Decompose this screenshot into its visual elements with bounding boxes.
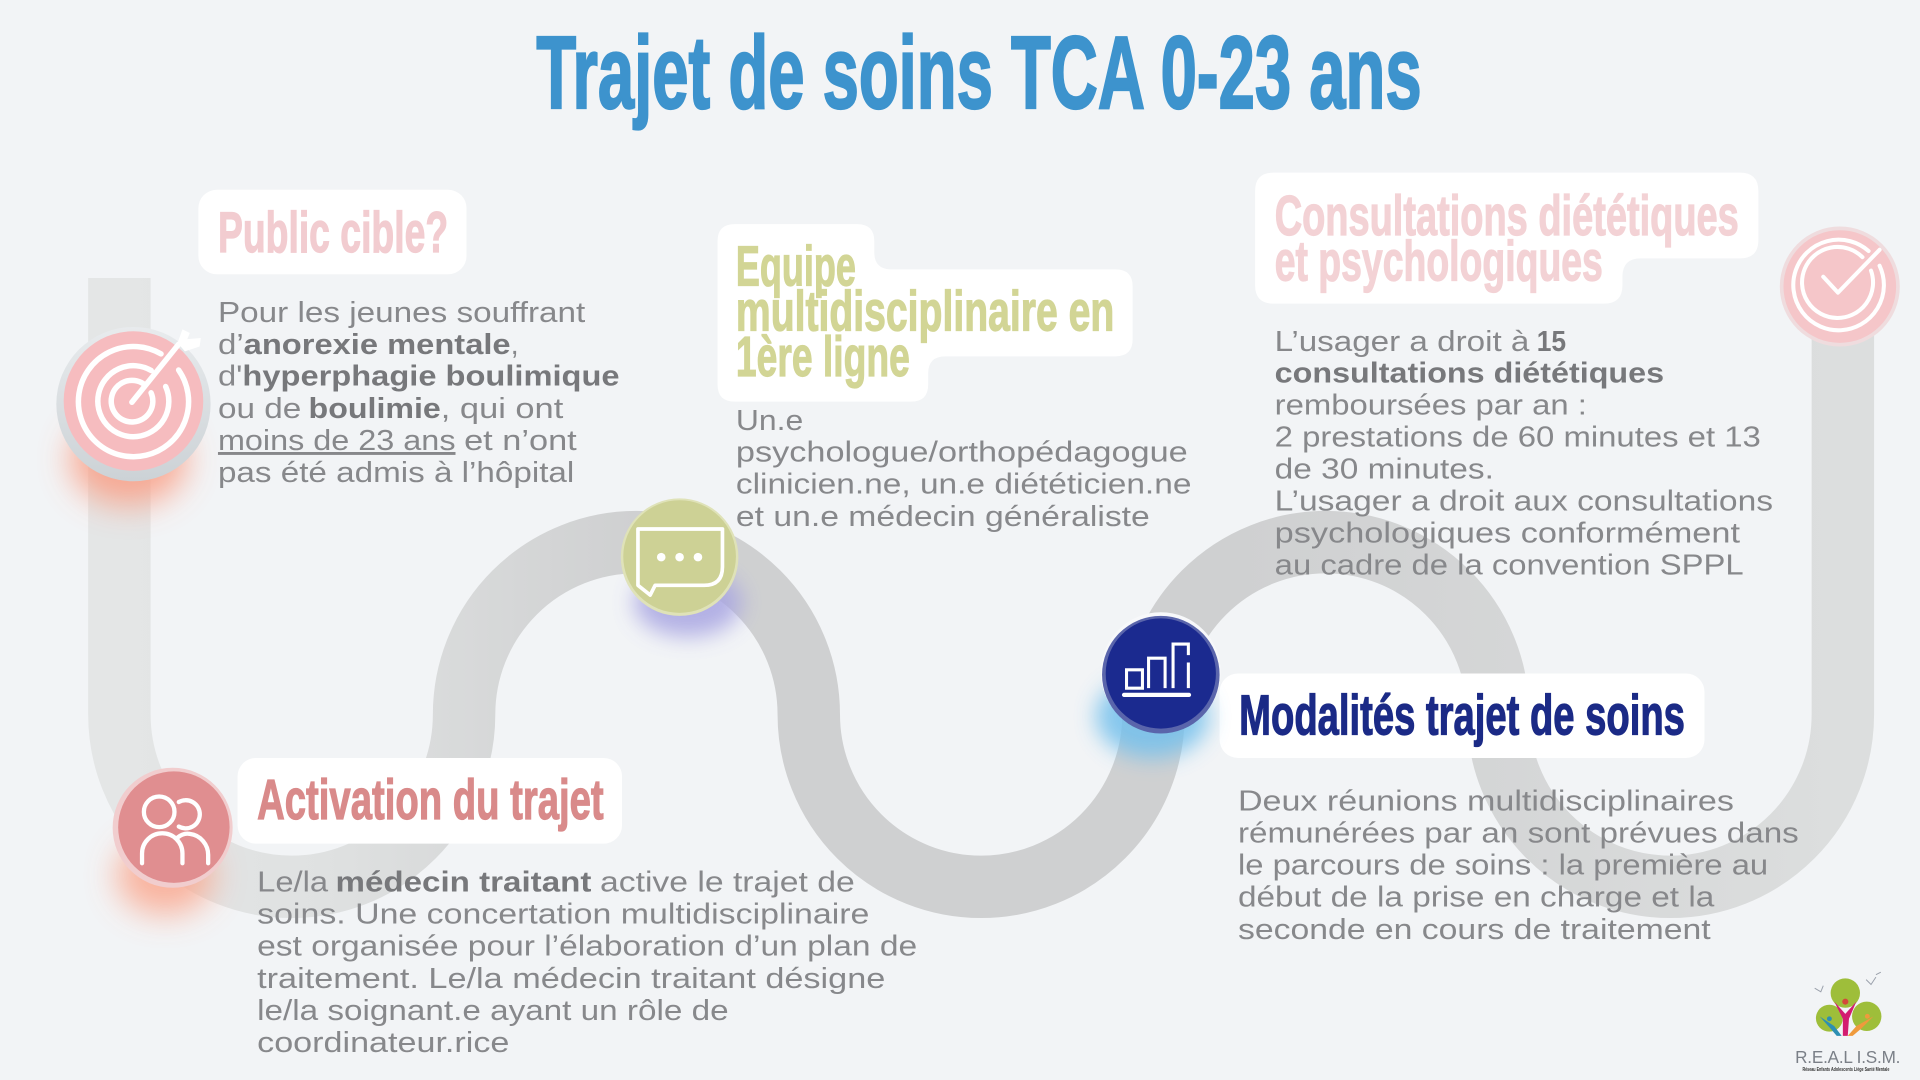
- heading box: public cible: [198, 190, 467, 274]
- logo wordmark: R.E.A.L I.S.M.: [1795, 1047, 1900, 1067]
- text block: public cible: Pour les jeunes souffrant: [218, 297, 585, 329]
- icon: bar chart: [1096, 612, 1221, 758]
- heading: consultations: [1275, 184, 1739, 292]
- text block: consultations: L’usager a droit aux consultations: [1275, 486, 1773, 518]
- text block: equipe: Un.e: [736, 405, 803, 437]
- text block: consultations: psychologiques conformément: [1275, 517, 1740, 549]
- heading box: activation: [238, 758, 622, 844]
- heading: activation: Activation du trajet: [257, 768, 604, 831]
- text block: public cible: [218, 297, 620, 489]
- text block: activation: soins. Une concertation multidisciplinaire: [257, 899, 869, 931]
- text block: consultations: remboursées par an :: [1275, 389, 1587, 421]
- text block: activation: Le/la: [257, 866, 329, 898]
- text block: activation: [257, 866, 917, 1059]
- text block: activation: est organisée pour l’élaboration d’un plan de: [257, 931, 917, 963]
- icon: people: [113, 768, 233, 915]
- logo: REALISM: [1795, 972, 1900, 1073]
- text block: public cible: moins de 23 ans: [218, 425, 456, 457]
- title: Trajet de soins TCA 0-23 ans: [536, 15, 1422, 130]
- heading box: consultations: [1255, 173, 1758, 304]
- text block: public cible: d’: [218, 329, 244, 361]
- text block: consultations: consultations diététiques: [1275, 358, 1664, 390]
- text block: equipe: [736, 405, 1191, 533]
- text block: consultations: 15: [1537, 326, 1566, 358]
- text block: consultations: L’usager a droit à: [1275, 326, 1530, 358]
- text block: activation: active le trajet de: [600, 866, 855, 898]
- text block: public cible: anorexie mentale: [244, 329, 511, 361]
- text block: public cible: pas été admis à l’hôpital: [218, 457, 574, 489]
- text block: consultations: de 30 minutes.: [1275, 454, 1494, 486]
- text block: public cible: d': [218, 361, 242, 393]
- icon: check: [1780, 227, 1900, 347]
- text block: public cible: ou de: [218, 393, 301, 425]
- text block: activation: coordinateur.rice: [257, 1027, 509, 1059]
- icon: chat bubble: [621, 498, 742, 637]
- heading: public cible: Public cible?: [218, 201, 448, 265]
- panel: consultations: [1255, 173, 1773, 581]
- heading box: equipe: [718, 224, 1133, 402]
- text block: modalites: le parcours de soins : la première au: [1238, 849, 1768, 881]
- text block: equipe: clinicien.ne, un.e diététicien.ne: [736, 468, 1191, 500]
- panel: equipe multidisciplinaire: [718, 224, 1191, 533]
- arrow fletching: [178, 329, 201, 351]
- text block: equipe: psychologue/orthopédagogue: [736, 437, 1188, 469]
- text block: activation: traitement. Le/la médecin traitant désigne: [257, 963, 885, 995]
- logo tree: [1815, 972, 1881, 1036]
- heading: equipe: Equipe: [736, 234, 856, 297]
- text block: consultations: 2 prestations de 60 minutes et 13: [1275, 422, 1761, 454]
- text block: consultations: [1275, 326, 1773, 581]
- heading box: modalites: [1220, 673, 1704, 758]
- heading: equipe: multidisciplinaire en: [736, 280, 1114, 343]
- heading: consultations: et psychologiques: [1275, 229, 1603, 292]
- panel: modalites: [1220, 673, 1799, 946]
- text block: modalites: rémunérées par an sont prévues dans: [1238, 817, 1799, 849]
- text block: activation: médecin traitant: [336, 866, 592, 898]
- text block: public cible: et n’ont: [464, 425, 577, 457]
- icon: target: [56, 327, 211, 506]
- panel: activation: [238, 758, 917, 1059]
- text block: public cible: , qui ont: [441, 393, 563, 425]
- text block: equipe: et un.e médecin généraliste: [736, 501, 1150, 533]
- heading: modalites: Modalités trajet de soins: [1239, 684, 1685, 747]
- text block: consultations: au cadre de la convention SPPL: [1275, 549, 1744, 581]
- heading: equipe: 1ère ligne: [736, 325, 910, 388]
- heading: equipe: [736, 234, 1114, 388]
- text block: modalites: [1238, 786, 1799, 946]
- text block: modalites: Deux réunions multidisciplinaires: [1238, 786, 1734, 818]
- text block: public cible: hyperphagie boulimique: [242, 361, 620, 393]
- panel: public cible: [198, 190, 620, 489]
- text block: activation: le/la soignant.e ayant un rôle de: [257, 995, 729, 1027]
- text block: public cible: boulimie: [309, 393, 441, 425]
- text block: modalites: seconde en cours de traitement: [1238, 914, 1711, 946]
- text block: public cible: ,: [511, 329, 519, 361]
- text block: modalites: début de la prise en charge et la: [1238, 882, 1715, 914]
- winding road path: [119, 278, 1843, 887]
